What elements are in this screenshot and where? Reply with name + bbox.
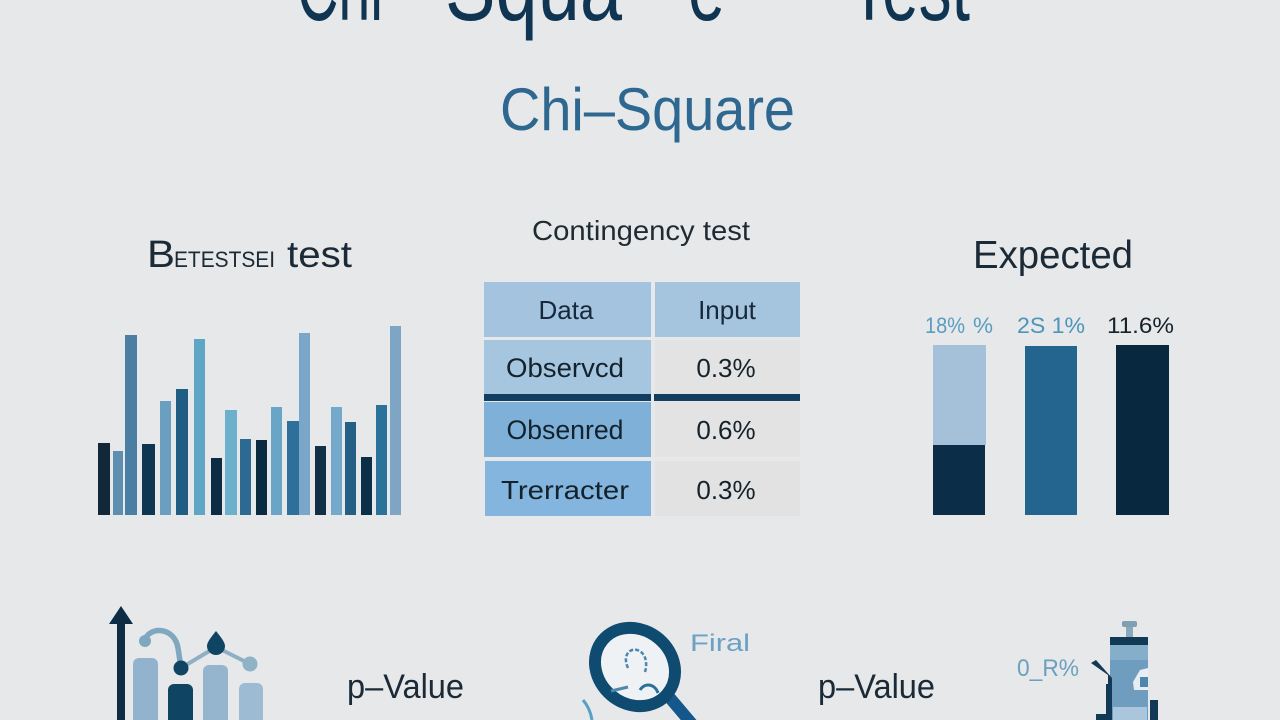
- table divider: [484, 394, 800, 401]
- table row: observed 1: 0.3%: [696, 353, 756, 383]
- bar labels: 18%: [925, 313, 965, 338]
- table header row: Data: [539, 295, 594, 325]
- panel: left bar chart: [98, 234, 401, 515]
- subtitle: Chi–Square: [500, 76, 795, 143]
- heading: expected: Expected: [973, 234, 1133, 277]
- table row: third: 0.3%: [696, 475, 756, 505]
- panel: expected bars: [925, 234, 1174, 515]
- bar labels: 2S 1%: [1017, 313, 1085, 338]
- heading: left chart: B: [147, 234, 175, 276]
- table header row: [484, 282, 800, 337]
- table row: observed 1: Observcd: [506, 353, 624, 383]
- heading: left chart: test: [287, 234, 353, 275]
- table row: third: [485, 461, 800, 516]
- bar labels: 11.6%: [1107, 313, 1174, 338]
- table row: third: Trerracter: [501, 475, 629, 505]
- bar labels: [925, 313, 1174, 338]
- icon: magnifying glass: [579, 612, 692, 720]
- heading: left chart: ETESTSEI: [174, 247, 275, 272]
- table row: observed 2: [484, 402, 800, 457]
- title: [297, 0, 970, 41]
- label: final: Firal: [690, 630, 750, 657]
- icon: bottle device: [1091, 621, 1158, 720]
- panel: contingency table: [484, 215, 800, 516]
- table row: observed 2: Obsenred: [506, 415, 624, 445]
- label: p-value right: p–Value: [818, 668, 935, 706]
- icon: chart with arrow: [109, 606, 263, 720]
- bar chart: [98, 326, 401, 515]
- table row: observed 1: [484, 340, 800, 394]
- bar labels: %: [973, 313, 993, 338]
- heading: left chart: [147, 234, 353, 276]
- table row: observed 2: 0.6%: [696, 415, 756, 445]
- label: percent: 0_R%: [1017, 655, 1079, 682]
- heading: contingency: Contingency test: [532, 215, 750, 246]
- table header row: Input: [698, 295, 757, 325]
- stacked bar chart: [933, 345, 1169, 515]
- label: p-value left: p–Value: [347, 668, 464, 706]
